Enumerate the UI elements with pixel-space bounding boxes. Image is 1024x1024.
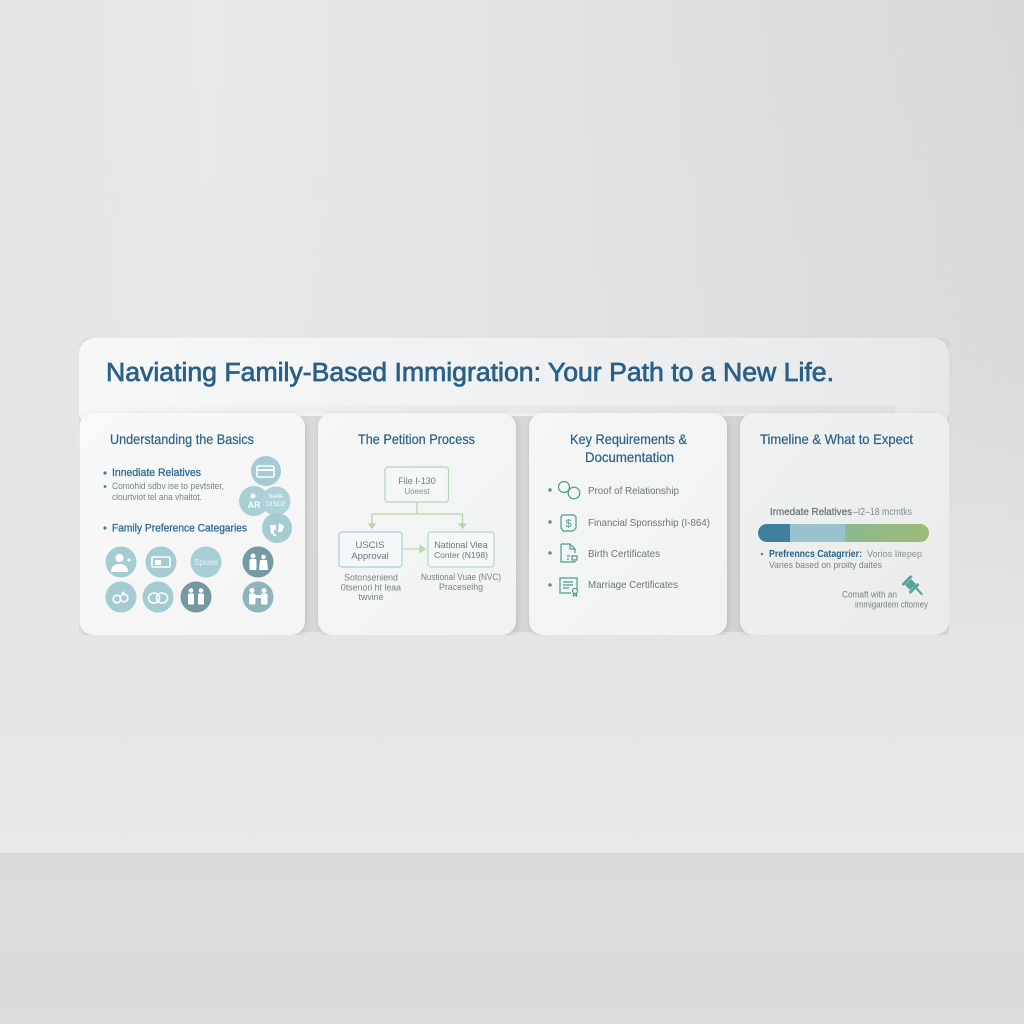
caption: USCIS step: Sotonseniend bbox=[344, 572, 398, 582]
caption: NVC step bbox=[421, 572, 501, 592]
title: Naviating Family-Based Immigration: Your Path to a New Life. bbox=[106, 359, 834, 387]
item: marriage certificates: Marriage Certificates bbox=[588, 579, 678, 591]
arrow: split to two steps bbox=[369, 502, 466, 528]
icon: document circle: DISCE bbox=[266, 501, 287, 508]
floor bbox=[0, 853, 1024, 1024]
icon: gavel bbox=[902, 575, 923, 596]
item: financial sponsorship: Financial Sponssrhip (I-864) bbox=[588, 517, 710, 529]
item: financial sponsorship: $ bbox=[565, 518, 572, 530]
heading: understanding the basics: Understanding the Basics bbox=[110, 431, 254, 447]
icon: card circle bbox=[251, 456, 281, 486]
caption: USCIS step bbox=[341, 572, 401, 602]
label: immediate relatives duration: Irmedate Relatives bbox=[770, 506, 852, 518]
icon: people circle bbox=[239, 486, 269, 516]
note: preference categories: Prefrenncs Catagrrier: bbox=[769, 548, 862, 560]
panel: petition process bbox=[318, 413, 516, 635]
step box: national visa center bbox=[428, 532, 494, 567]
icon: spouse circle bbox=[190, 546, 222, 578]
panel: key requirements bbox=[529, 413, 727, 635]
heading: key requirements and documentation: Key Requirements & bbox=[570, 431, 688, 447]
bullet list: immediate relatives: clourtviot tel ana vhaltot. bbox=[112, 492, 202, 503]
bullet list: immediate relatives bbox=[103, 467, 224, 503]
caption: NVC step: Praceseihg bbox=[439, 582, 483, 592]
arrow: to national visa center bbox=[403, 546, 425, 552]
label: immediate relatives duration: –I2–18 mcmtks bbox=[853, 507, 912, 518]
step box: national visa center: Conter (N198) bbox=[434, 550, 488, 560]
icon: document circle bbox=[262, 486, 290, 516]
note: consult an attorney: immigardem cltomey bbox=[855, 600, 929, 610]
caption: NVC step: Nustional Vuae (NVC) bbox=[421, 572, 501, 582]
icon: spouse circle: Spuse bbox=[194, 557, 218, 567]
icon: couple circle bbox=[242, 582, 274, 612]
step box: file I-130: Uoeest bbox=[404, 487, 430, 496]
icon: document circle: NAME bbox=[269, 494, 284, 500]
step box: USCIS approval bbox=[339, 532, 402, 567]
icon: person circle bbox=[106, 546, 136, 578]
step box: USCIS approval: USCIS bbox=[355, 540, 385, 551]
step box: file I-130: File I-130 bbox=[398, 476, 436, 486]
note: consult an attorney bbox=[842, 590, 929, 610]
note: consult an attorney: Comaft with an bbox=[842, 590, 897, 600]
step box: USCIS approval: Approval bbox=[351, 551, 389, 562]
icon: rings knot circle bbox=[106, 582, 136, 612]
bullet: family preference categories: Family Preference Categaries bbox=[112, 522, 247, 534]
panel: timeline bbox=[740, 413, 949, 635]
label: immediate relatives duration bbox=[770, 506, 912, 518]
heading: timeline and what to expect: Timeline & What to Expect bbox=[760, 431, 913, 447]
item: birth certificates: Birth Certificates bbox=[588, 548, 660, 560]
icon: people circle: AR bbox=[248, 500, 261, 510]
item: proof of relationship bbox=[548, 482, 679, 499]
caption: USCIS step: twvine bbox=[359, 592, 384, 602]
bullet list: immediate relatives: Innediate Relatives bbox=[112, 467, 201, 479]
timeline bar bbox=[758, 524, 929, 542]
heading: key requirements and documentation bbox=[570, 431, 688, 465]
icon: family circle bbox=[262, 513, 292, 543]
note: preference categories: Varies based on proiity daites bbox=[769, 560, 882, 571]
step box: national visa center: National Viea bbox=[434, 540, 488, 550]
item: financial sponsorship bbox=[548, 515, 710, 531]
heading: the petition process: The Petition Process bbox=[358, 431, 475, 447]
icon: parents dark circle bbox=[180, 582, 212, 612]
main panel bbox=[79, 338, 949, 635]
note: preference categories bbox=[761, 548, 922, 571]
heading: key requirements and documentation: Documentation bbox=[585, 449, 674, 465]
bullet list: immediate relatives: Comohid sdbv ise to pevtsiter, bbox=[112, 481, 224, 492]
icon: couple dark circle bbox=[242, 546, 274, 578]
panel: understanding the basics bbox=[80, 413, 305, 635]
item: birth certificates bbox=[548, 544, 660, 562]
caption: USCIS step: 0tsenori ht leaa bbox=[341, 582, 401, 592]
item: proof of relationship: Proof of Relationship bbox=[588, 485, 679, 497]
note: preference categories: Vorios Iitepep bbox=[867, 549, 922, 560]
icon: rings circle bbox=[142, 582, 174, 612]
item: marriage certificates bbox=[548, 578, 678, 596]
step box: file I-130 bbox=[385, 467, 448, 502]
icon: photo card circle bbox=[146, 546, 176, 578]
